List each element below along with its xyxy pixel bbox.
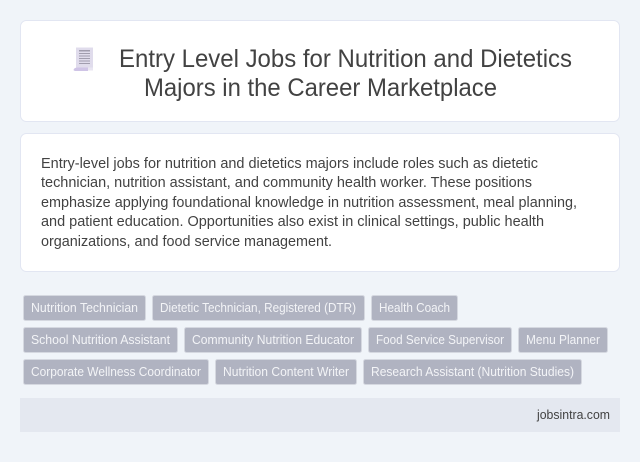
tag: Dietetic Technician, Registered (DTR) (152, 296, 364, 320)
icon: paper scroll (74, 48, 93, 71)
tag: Nutrition Content Writer (216, 360, 356, 384)
tag: Research Assistant (Nutrition Studies) (364, 360, 582, 384)
tag: School Nutrition Assistant: School Nutrition Assistant (31, 333, 171, 347)
tag: Menu Planner: Menu Planner (526, 333, 600, 347)
panel: title card (20, 20, 620, 122)
tag: Nutrition Technician (24, 296, 146, 320)
tag: Corporate Wellness Coordinator (24, 360, 208, 384)
tag: Research Assistant (Nutrition Studies): Research Assistant (Nutrition Studies) (371, 365, 574, 379)
tag: Food Service Supervisor: Food Service Supervisor (376, 333, 504, 347)
text block: description: emphasize applying foundational knowledge in nutrition assessment, meal planning, (41, 194, 577, 211)
tag: Corporate Wellness Coordinator: Corporate Wellness Coordinator (31, 365, 201, 379)
tag: Health Coach (372, 296, 458, 320)
heading: Entry Level Jobs for Nutrition and Dietetics (119, 45, 572, 73)
tag: Nutrition Technician: Nutrition Technician (31, 301, 138, 315)
tag: Nutrition Content Writer: Nutrition Content Writer (223, 365, 349, 379)
text block: description: technician, nutrition assistant, and community health worker. These positions (41, 174, 532, 191)
tag: Community Nutrition Educator: Community Nutrition Educator (192, 333, 354, 347)
tag: School Nutrition Assistant (24, 328, 178, 352)
tag: Menu Planner (518, 328, 608, 352)
heading: Majors in the Career Marketplace (144, 74, 497, 102)
tag: Food Service Supervisor (368, 328, 512, 352)
text block: description (41, 155, 577, 250)
text block: description: and patient education. Opportunities also exist in clinical settings, public health (41, 213, 544, 230)
tag: Dietetic Technician, Registered (DTR): Dietetic Technician, Registered (DTR) (160, 301, 356, 315)
heading (119, 45, 572, 102)
tag: Community Nutrition Educator (184, 328, 362, 352)
footer bar (20, 398, 620, 432)
text block: description: organizations, and food service management. (41, 233, 332, 250)
tag list (24, 296, 608, 384)
footer source text: jobsintra.com (536, 408, 610, 422)
text block: description: Entry-level jobs for nutrition and dietetics majors include roles such as dietetic (41, 155, 538, 172)
panel: description (20, 134, 620, 272)
tag: Health Coach: Health Coach (379, 301, 450, 315)
